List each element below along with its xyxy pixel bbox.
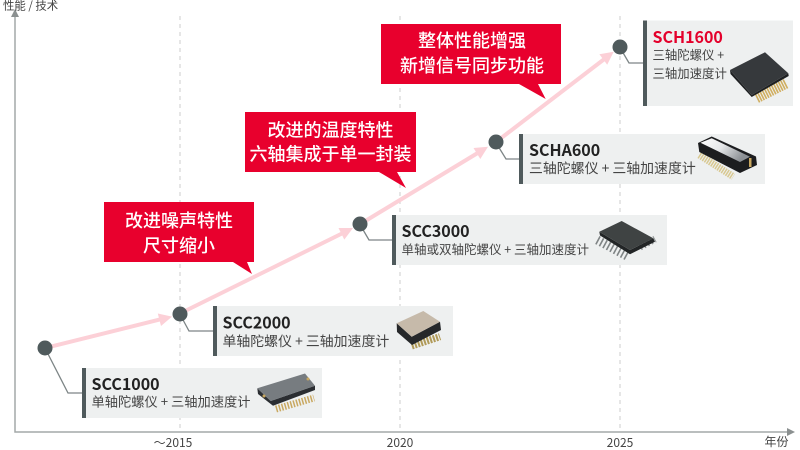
trend arrows: [48, 52, 614, 347]
panel: SCC1000: SCC1000: [92, 371, 160, 395]
callout: noise and size: 尺寸缩小: [143, 232, 215, 258]
connectors: [47, 51, 643, 393]
panel: SCC2000: [213, 306, 453, 356]
panel: SCC3000: [392, 215, 667, 265]
icon: SCH1600 chip: [730, 52, 789, 98]
panel: SCC3000: SCC3000: [402, 218, 470, 242]
callout: temperature and package: 改进的温度特性: [268, 116, 394, 142]
panel: SCH1600: SCH1600: [652, 24, 723, 48]
panel: SCH1600: 三轴陀螺仪 +: [652, 46, 724, 64]
x axis label: year: 年份: [764, 433, 789, 450]
panel: SCH1600: 三轴加速度计: [652, 64, 727, 82]
panel: SCH1600: [643, 20, 793, 106]
callout: temperature and package: 六轴集成于单一封装: [250, 140, 412, 166]
panel: SCC1000: [82, 368, 322, 418]
icon: SCHA600 chip: [698, 136, 757, 177]
callout: noise and size: 改进噪声特性: [125, 207, 233, 233]
panel: SCC2000: 单轴陀螺仪 + 三轴加速度计: [222, 331, 389, 351]
icon: SCC3000 chip: [597, 221, 655, 257]
panel: SCC2000: SCC2000: [222, 310, 291, 334]
callout: overall performance: [381, 24, 561, 99]
callout: noise and size: [104, 202, 254, 274]
callout: overall performance: 新增信号同步功能: [400, 52, 544, 78]
callout: overall performance: 整体性能增强: [418, 27, 526, 53]
panel: SCHA600: 三轴陀螺仪 + 三轴加速度计: [529, 158, 696, 178]
panel: SCHA600: SCHA600: [529, 137, 600, 161]
panel: SCC3000: 单轴或双轴陀螺仪 + 三轴加速度计: [402, 239, 589, 258]
panel: SCC1000: 单轴陀螺仪 + 三轴加速度计: [92, 392, 251, 410]
icon: SCC2000 chip: [397, 311, 441, 346]
timeline nodes: [38, 40, 628, 356]
callout: temperature and package: [245, 112, 416, 188]
panel: SCHA600: [519, 134, 765, 184]
icon: SCC1000 chip: [257, 374, 315, 409]
